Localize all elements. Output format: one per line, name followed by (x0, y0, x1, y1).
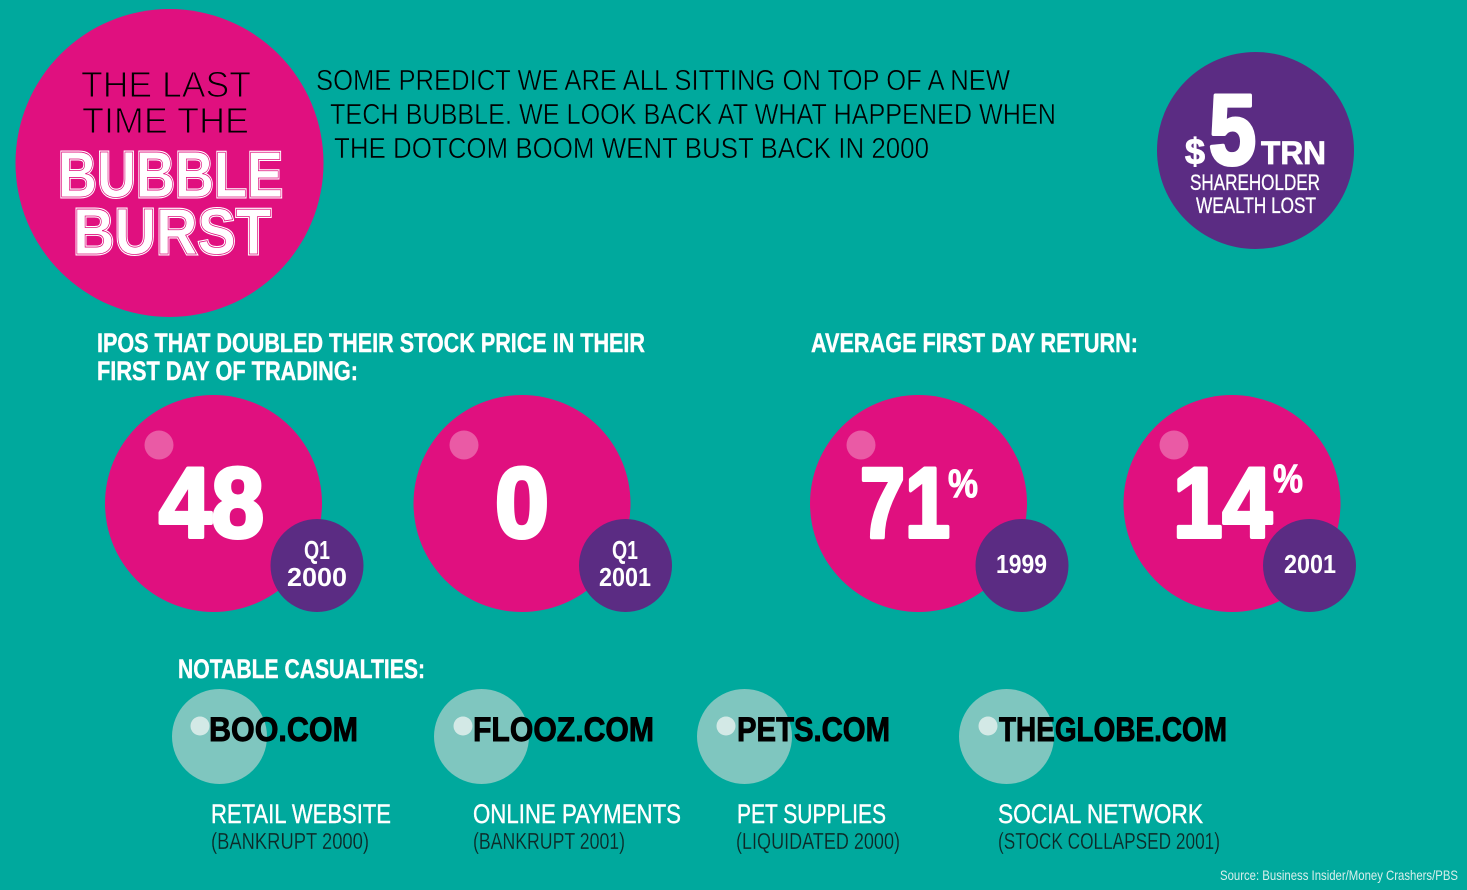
title: the last time the: THE LAST (81, 64, 251, 105)
casualty: flooz.com: ONLINE PAYMENTS (473, 799, 681, 829)
heading: IPOs (97, 328, 645, 386)
stat bubble: 0 in Q1 2001: 0 (495, 447, 549, 558)
stat bubble: 0 in Q1 2001: Q1 (612, 535, 638, 565)
casualty: pets.com: PETS.COM (737, 711, 890, 749)
intro text: TECH BUBBLE. WE LOOK BACK AT WHAT HAPPENED WHEN (330, 99, 1056, 131)
casualty: boo.com: (BANKRUPT 2000) (211, 828, 369, 854)
callout: $5 trillion wealth lost (1157, 52, 1354, 249)
heading: notable casualties: NOTABLE CASUALTIES: (178, 654, 425, 684)
stat bubble: 14% in 2001 (1124, 395, 1356, 612)
title: bubble burst: BURST (73, 195, 271, 268)
stat bubble: 48 in Q1 2000 (105, 395, 364, 612)
stat bubble: 71% in 1999 (810, 395, 1068, 612)
title: bubble burst: BURST (73, 195, 271, 268)
stat bubble: 71% in 1999: % (948, 462, 978, 506)
casualty: boo.com (172, 689, 391, 854)
casualty: pets.com (697, 689, 900, 854)
stat bubble: 48 in Q1 2000: 48 (159, 447, 264, 558)
stat bubble: 48 in Q1 2000: 2000 (287, 562, 347, 592)
stat bubble: 0 in Q1 2001 (414, 395, 672, 612)
stat bubble: 14% in 2001: 2001 (1284, 549, 1336, 579)
casualty: boo.com: BOO.COM (209, 711, 358, 749)
title: bubble burst (58, 138, 283, 268)
title: the last time the (81, 64, 251, 141)
stat bubble: 71% in 1999: 71 (860, 447, 950, 558)
casualty: theglobe.com (959, 689, 1227, 854)
heading: IPOs: FIRST DAY OF TRADING: (97, 356, 358, 386)
casualty: flooz.com (434, 689, 681, 854)
title badge (16, 9, 324, 317)
casualty: theglobe.com: THEGLOBE.COM (999, 711, 1227, 749)
title: bubble burst: BUBBLE (58, 138, 283, 211)
title: bubble burst: BUBBLE (58, 138, 283, 211)
intro text (316, 65, 1056, 165)
stat bubble: 71% in 1999: 1999 (996, 549, 1047, 579)
casualty: theglobe.com: (STOCK COLLAPSED 2001) (998, 828, 1220, 854)
casualty: flooz.com: FLOOZ.COM (473, 711, 654, 749)
casualty: flooz.com: (BANKRUPT 2001) (473, 828, 625, 854)
heading: average return: AVERAGE FIRST DAY RETURN: (811, 328, 1138, 358)
casualty: boo.com: RETAIL WEBSITE (211, 799, 391, 829)
callout: $5 trillion wealth lost: SHAREHOLDER (1190, 170, 1320, 195)
casualty: pets.com: PET SUPPLIES (737, 799, 886, 829)
stat bubble: 14% in 2001: 14 (1173, 447, 1272, 558)
intro text: SOME PREDICT WE ARE ALL SITTING ON TOP OF A NEW (316, 65, 1011, 97)
intro text: THE DOTCOM BOOM WENT BUST BACK IN 2000 (334, 133, 929, 165)
stat bubble: 48 in Q1 2000: Q1 (304, 535, 330, 565)
callout: $5 trillion wealth lost: TRN (1261, 135, 1326, 171)
stat bubble: 0 in Q1 2001: 2001 (599, 562, 651, 592)
heading: IPOs: IPOS THAT DOUBLED THEIR STOCK PRICE IN THEIR (97, 328, 645, 358)
casualty: pets.com: (LIQUIDATED 2000) (736, 828, 900, 854)
callout: $5 trillion wealth lost: WEALTH LOST (1196, 193, 1316, 218)
callout: $5 trillion wealth lost: 5 (1209, 74, 1256, 185)
casualty: theglobe.com: SOCIAL NETWORK (998, 799, 1203, 829)
title: the last time the: TIME THE (82, 100, 249, 141)
callout: $5 trillion wealth lost: $ (1185, 131, 1205, 172)
stat bubble: 14% in 2001: % (1273, 457, 1303, 501)
